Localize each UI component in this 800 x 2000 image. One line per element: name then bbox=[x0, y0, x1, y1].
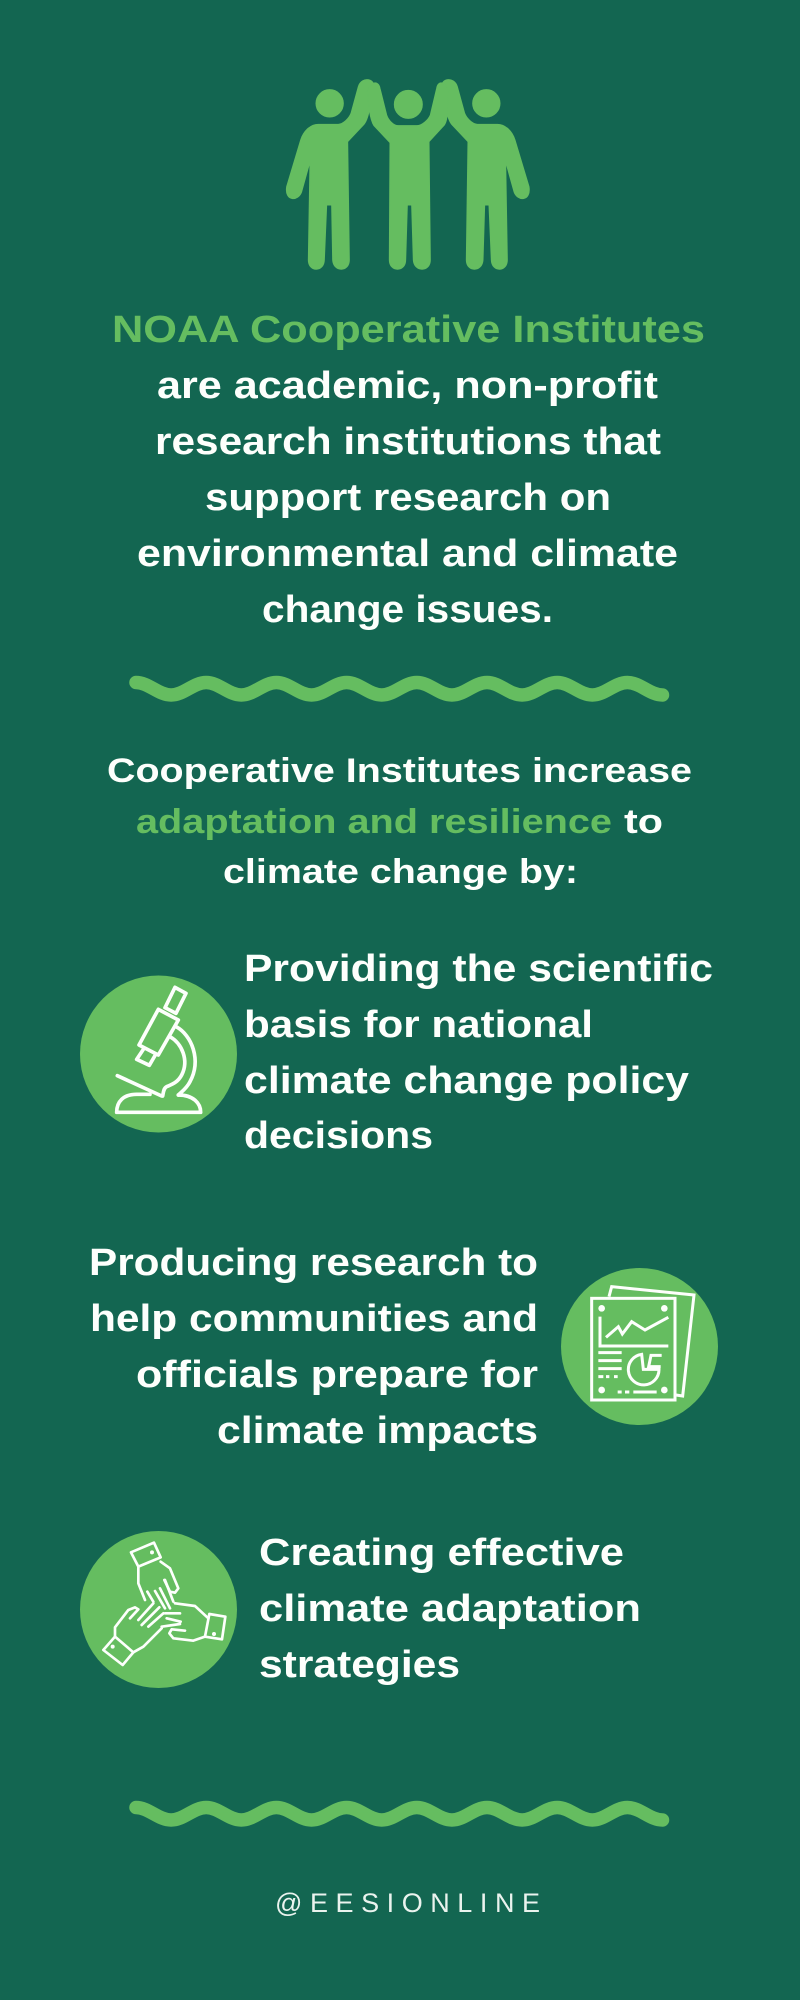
text: item 1: Providing the scientific bbox=[244, 948, 713, 990]
divider: wave top bbox=[136, 682, 662, 695]
text: item 1: decisions bbox=[244, 1115, 433, 1157]
text: item 3 bbox=[259, 1532, 641, 1686]
icon: three joined hands bbox=[80, 1531, 237, 1688]
text: description: environmental and climate bbox=[137, 533, 678, 575]
heading: NOAA Cooperative Institutes: NOAA Cooperative Institutes bbox=[112, 309, 705, 351]
text: description: support research on bbox=[205, 477, 611, 519]
subheading: adaptation and resilience: climate change by: bbox=[223, 853, 578, 891]
text: item 1: basis for national bbox=[244, 1004, 593, 1046]
text: item 1 bbox=[244, 948, 713, 1157]
icon: three people high-fiving bbox=[286, 80, 529, 269]
text: item 3: climate adaptation bbox=[259, 1588, 641, 1630]
text: item 2: Producing research to bbox=[89, 1242, 538, 1284]
subheading: adaptation and resilience: to bbox=[624, 803, 663, 841]
text: item 2: climate impacts bbox=[217, 1410, 538, 1452]
subheading: adaptation and resilience bbox=[107, 752, 692, 891]
text: item 3: strategies bbox=[259, 1644, 460, 1686]
text: item 3: Creating effective bbox=[259, 1532, 624, 1574]
icon: report with charts bbox=[561, 1268, 718, 1425]
item 1: scientific basis bbox=[80, 948, 713, 1157]
item 3: adaptation strategies bbox=[80, 1531, 641, 1688]
divider: wave bottom bbox=[136, 1808, 662, 1820]
icon: microscope bbox=[80, 976, 237, 1132]
footer: social handle: @EESIONLINE bbox=[275, 1888, 540, 1918]
text: description: research institutions that bbox=[155, 421, 661, 463]
subheading: adaptation and resilience: Cooperative Institutes increase bbox=[107, 752, 692, 790]
heading: intro statement bbox=[112, 309, 705, 631]
text: description: change issues. bbox=[262, 589, 553, 631]
text: description: are academic, non-profit bbox=[157, 365, 658, 407]
text: item 1: climate change policy bbox=[244, 1060, 689, 1102]
item 2: research for communities bbox=[89, 1242, 718, 1452]
text: item 2: help communities and bbox=[90, 1298, 538, 1340]
text: item 2 bbox=[89, 1242, 538, 1452]
text: item 2: officials prepare for bbox=[136, 1354, 538, 1396]
text: description bbox=[137, 365, 678, 631]
subheading: adaptation and resilience: adaptation and resilience bbox=[136, 803, 612, 841]
